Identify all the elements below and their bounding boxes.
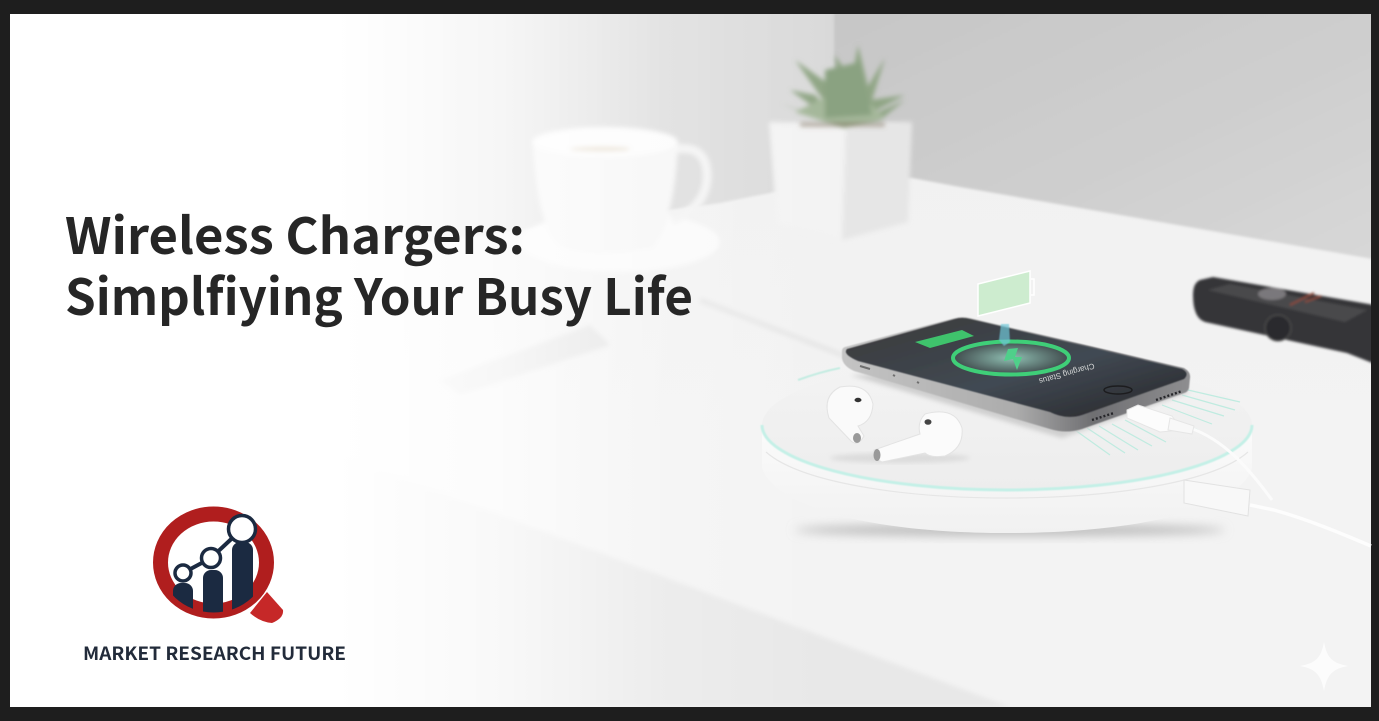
photo background: wall and table xyxy=(358,14,1371,707)
bar chart bars xyxy=(173,542,253,612)
title: Wireless Chargers: xyxy=(65,197,525,269)
title: Simplfiying Your Busy Life xyxy=(65,258,693,330)
left earbud xyxy=(827,386,873,443)
earbuds xyxy=(827,386,970,463)
charging ring xyxy=(953,342,1069,374)
pad base xyxy=(762,425,1252,533)
phone shadow xyxy=(850,370,1190,438)
background potted plant xyxy=(769,45,912,240)
bolt icon xyxy=(1004,348,1022,370)
magnifier ring xyxy=(160,514,266,611)
light beam xyxy=(999,324,1010,346)
right earbud xyxy=(874,412,962,462)
screen battery xyxy=(915,330,974,348)
pad shadow xyxy=(795,524,1225,536)
teal glow rim xyxy=(762,425,1252,490)
charging light rays xyxy=(1075,390,1240,455)
screen text: Charging Status xyxy=(1038,361,1096,386)
logo: Market Research Future xyxy=(83,514,346,666)
background coffee cup xyxy=(520,127,720,272)
phone screen xyxy=(846,318,1187,417)
home button xyxy=(1104,386,1132,394)
magnifier handle xyxy=(250,592,283,623)
logo wordmark: MARKET RESEARCH FUTURE xyxy=(83,640,346,666)
smartphone xyxy=(842,317,1190,438)
charging cable xyxy=(1127,405,1371,546)
pad top surface xyxy=(762,360,1252,490)
side buttons xyxy=(860,366,919,383)
pad lip xyxy=(766,452,1248,498)
background smartwatch xyxy=(1193,277,1379,366)
floating battery icon xyxy=(978,271,1034,316)
background faded phone xyxy=(440,325,610,395)
sparkle watermark xyxy=(1300,642,1348,691)
speaker holes xyxy=(1092,413,1114,420)
trend nodes xyxy=(175,565,191,581)
phone body xyxy=(842,317,1190,432)
wireless charging pad xyxy=(762,360,1252,536)
title xyxy=(65,197,693,330)
USB plug xyxy=(1184,480,1250,516)
trend line xyxy=(183,529,242,573)
